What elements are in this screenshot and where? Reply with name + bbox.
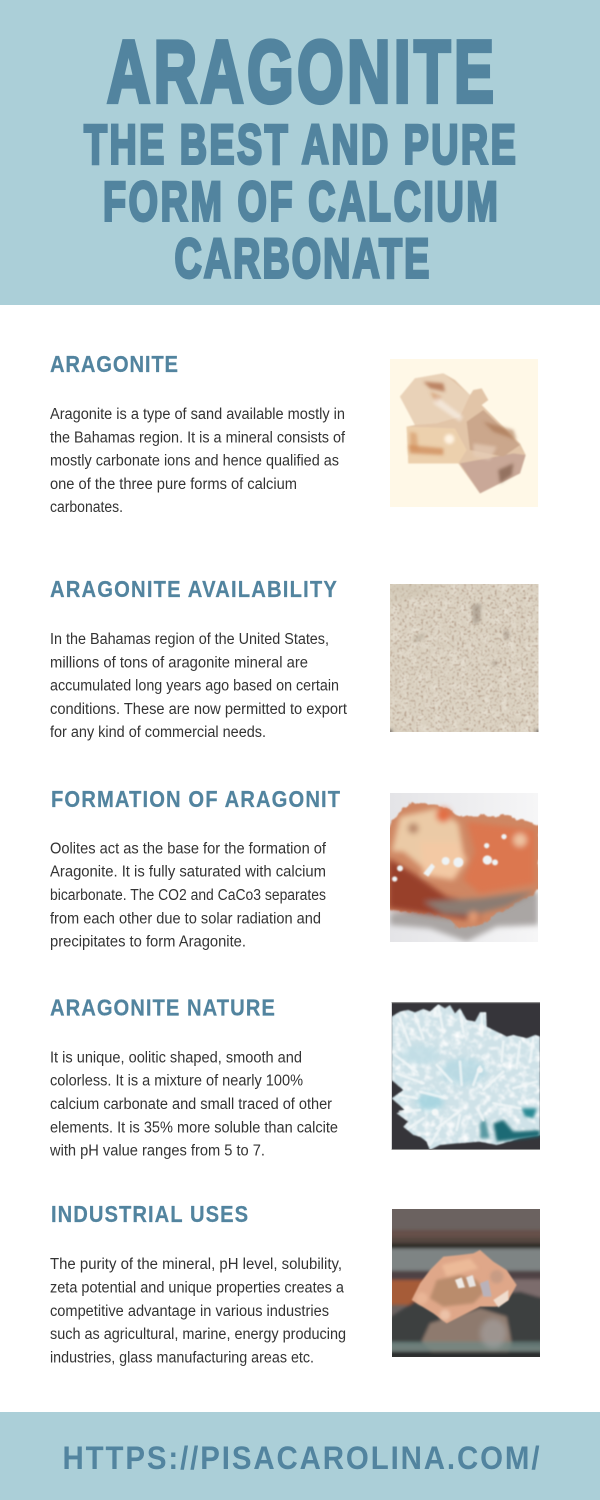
text block: the Bahamas region. It is a mineral consists of (50, 429, 346, 446)
text block: carbonates. (50, 499, 123, 516)
text block: conditions. These are now permitted to export (50, 701, 348, 718)
text block: with pH value ranges from 5 to 7. (49, 1142, 265, 1160)
heading: ARAGONITE (50, 351, 178, 377)
text block: It is unique, oolitic shaped, smooth and (50, 1049, 302, 1066)
panel: aragonite availability (50, 576, 541, 741)
text block: mostly carbonate ions and hence qualified as (50, 453, 339, 470)
text block (49, 1049, 338, 1160)
text block (50, 1256, 346, 1366)
text block: colorless. It is a mixture of nearly 100% (50, 1073, 303, 1090)
subtitle (84, 114, 516, 290)
text block: elements. It is 35% more soluble than calcite (50, 1119, 338, 1136)
title: ARAGONITE (107, 22, 494, 121)
text block: millions of tons of aragonite mineral are (50, 654, 308, 671)
text block: In the Bahamas region of the United States, (50, 631, 329, 648)
heading: ARAGONITE NATURE (50, 994, 275, 1021)
subtitle: CARBONATE (174, 228, 429, 290)
text block: from each other due to solar radiation and (50, 910, 321, 927)
text block: Aragonite is a type of sand available mostly in (50, 406, 345, 423)
text block: Aragonite. It is fully saturated with calcium (50, 864, 326, 881)
text block (50, 631, 348, 741)
text block: competitive advantage in various industries (50, 1303, 329, 1320)
image: aragonite crystal (390, 359, 538, 507)
subtitle: FORM OF CALCIUM (103, 171, 498, 233)
text block: The purity of the mineral, pH level, solubility, (50, 1256, 342, 1273)
heading: ARAGONITE AVAILABILITY (50, 576, 337, 602)
text block: precipitates to form Aragonite. (50, 934, 246, 950)
website url: HTTPS://PISACAROLINA.COM/ (62, 1440, 540, 1476)
panel: formation of aragonite (50, 786, 540, 950)
heading: INDUSTRIAL USES (51, 1201, 248, 1227)
panel: aragonite nature (49, 994, 540, 1160)
footer banner (0, 1412, 600, 1500)
text block: bicarbonate. The CO2 and CaCo3 separates (50, 887, 326, 904)
panel: aragonite (50, 351, 538, 516)
heading: FORMATION OF ARAGONIT (51, 786, 340, 812)
text block: such as agricultural, marine, energy producing (50, 1326, 346, 1343)
text block: one of the three pure forms of calcium (50, 476, 297, 493)
panel: industrial uses (50, 1201, 543, 1366)
text block: Oolites act as the base for the formation of (50, 840, 327, 857)
image: aragonite sand (387, 584, 541, 734)
text block: industries, glass manufacturing areas etc. (50, 1350, 314, 1366)
text block: zeta potential and unique properties creates a (50, 1279, 344, 1296)
text block: calcium carbonate and small traced of other (50, 1096, 332, 1113)
image: blue aragonite cluster (392, 1002, 540, 1150)
image: aragonite on mirror (388, 1209, 543, 1359)
text block: for any kind of commercial needs. (50, 724, 266, 741)
text block (50, 840, 327, 950)
image: orange aragonite rock (387, 793, 540, 942)
header banner (0, 0, 600, 305)
subtitle: THE BEST AND PURE (84, 114, 516, 176)
text block (50, 406, 346, 516)
text block: accumulated long years ago based on certain (50, 678, 339, 695)
